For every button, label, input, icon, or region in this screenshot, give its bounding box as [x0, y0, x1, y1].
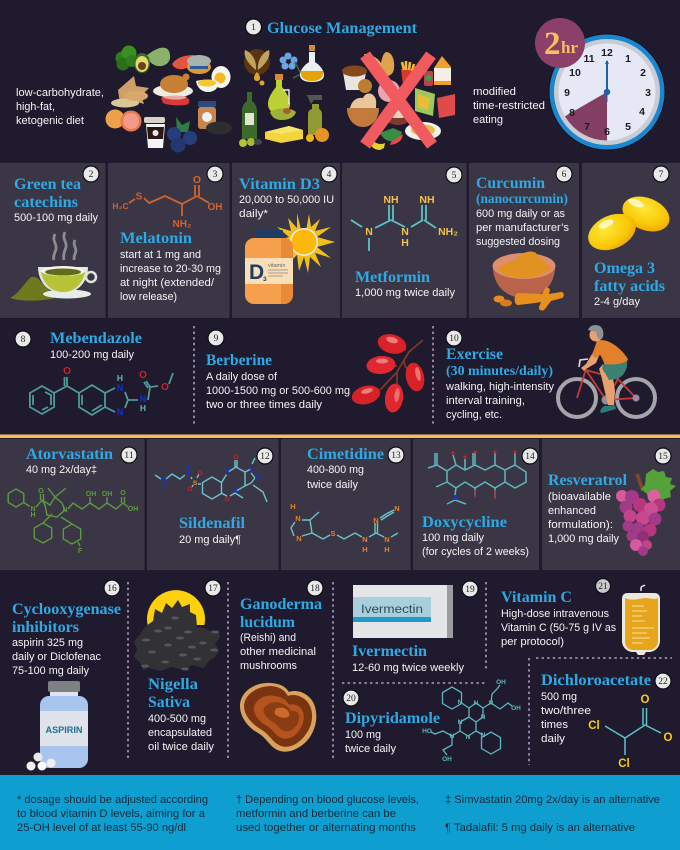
panel: curcumin [469, 163, 579, 318]
molecule: metformin: N [401, 226, 409, 238]
number 8: 8 [21, 335, 26, 345]
molecule: cimetidine: S [330, 529, 336, 538]
dose: formulation): [548, 519, 613, 531]
number 8 [15, 331, 31, 347]
molecule: cimetidine: N [295, 514, 301, 523]
panel: metformin [342, 163, 466, 318]
molecule: atorvastatin: O [38, 488, 44, 495]
panel: doxycycline [413, 439, 539, 570]
molecule: dichloroacetate: O [664, 732, 673, 744]
molecule: atorvastatin: OH [128, 506, 138, 513]
molecule: sildenafil: S [193, 480, 198, 487]
number 11: 11 [124, 451, 134, 461]
molecule: cimetidine: N [296, 534, 302, 543]
dose: 100 mg daily [422, 532, 484, 544]
number 4 [321, 166, 337, 182]
number 11 [121, 447, 137, 463]
number 7 [653, 166, 669, 182]
description: (Reishi) and [240, 632, 296, 644]
dose: 1000-1500 mg or 500-600 mg [206, 385, 350, 397]
number 12: 12 [260, 452, 270, 462]
molecule: mebendazole: N [117, 407, 123, 417]
number 18 [307, 580, 323, 596]
molecule: atorvastatin: N [30, 506, 36, 513]
number 16: 16 [107, 584, 117, 594]
dose: daily* [239, 208, 269, 220]
molecule: dichloroacetate [588, 694, 673, 770]
dose: per manufacturer’s [476, 222, 569, 234]
molecule: sildenafil: O [233, 454, 239, 461]
icon: clock with eating window: 2 [640, 67, 646, 79]
number 9 [208, 330, 224, 346]
text: time-restricted eating: modified [473, 86, 516, 98]
dose: suggested dosing [476, 236, 560, 248]
icon: clock with eating window: 7 [584, 121, 590, 133]
heading: Nigella [148, 676, 198, 693]
molecule: dipyridamole: N [474, 700, 479, 707]
panel: ivermectin [352, 581, 478, 674]
heading: catechins [14, 194, 78, 211]
icon group: keto foods [106, 46, 232, 152]
heading: Cyclooxygenase [12, 601, 121, 618]
molecule: atorvastatin: OH [102, 491, 112, 498]
molecule: dipyridamole: HO [422, 728, 432, 735]
dose: High-dose intravenous [501, 608, 609, 620]
heading: Ganoderma [240, 596, 322, 613]
panel: cyclooxygenase inhibitors [12, 580, 121, 770]
number 5: 5 [452, 171, 457, 181]
icon: cyclist [558, 325, 655, 417]
note: vitamin D: 25-OH level of at least 55-90 ng/dl [17, 822, 186, 834]
dose: twice daily [307, 479, 358, 491]
number 3: 3 [213, 170, 218, 180]
number 4: 4 [327, 170, 332, 180]
number 10 [446, 330, 462, 346]
dose: 2-4 g/day [594, 296, 640, 308]
number 16 [104, 580, 120, 596]
molecule: dipyridamole: N [458, 719, 463, 726]
number 15: 15 [658, 452, 668, 462]
molecule: sildenafil: N [185, 471, 190, 478]
number 13: 13 [391, 451, 401, 461]
note: metformin and berberine: metformin and berberine can be [236, 808, 396, 820]
molecule: metformin: H [401, 237, 409, 249]
dose: aspirin 325 mg [12, 637, 83, 649]
number 10: 10 [449, 334, 459, 344]
molecule: cimetidine: H [362, 545, 368, 554]
dose: start at 1 mg and [120, 249, 201, 261]
number 6 [556, 166, 572, 182]
icon: aspirin bottle [26, 681, 88, 770]
heading: Mebendazole [50, 330, 142, 347]
panel: dichloroacetate [541, 672, 673, 770]
number 22: 22 [658, 677, 668, 687]
dose: 500-100 mg daily [14, 212, 98, 224]
badge: 2hr [535, 18, 585, 68]
heading: Vitamin D3 [239, 176, 320, 193]
description: cycling, etc. [446, 409, 502, 421]
heading: Resveratrol [548, 472, 628, 489]
dose: daily [541, 733, 565, 745]
molecule: dichloroacetate: Cl [588, 720, 600, 732]
number 17: 17 [208, 584, 218, 594]
molecule: dipyridamole: N [466, 734, 471, 741]
molecule: sildenafil: N [233, 488, 238, 495]
molecule: melatonin: O [193, 174, 201, 186]
molecule: cimetidine: H [384, 545, 390, 554]
heading [12, 601, 121, 636]
icon: IV bag [622, 585, 660, 655]
dose: daily or Diclofenac [12, 651, 101, 663]
molecule: mebendazole: H [140, 403, 146, 413]
text: time-restricted eating: eating [473, 114, 503, 126]
dose: 600 mg daily or as [476, 208, 565, 220]
molecule: melatonin: H₃C [112, 201, 129, 211]
panel: berberine [206, 330, 427, 414]
dose: at night (extended/ [120, 277, 215, 289]
icon: vitamin D bottle: vitamin [268, 263, 285, 269]
heading: Berberine [206, 352, 272, 369]
heading: Atorvastatin [26, 446, 113, 463]
heading [240, 596, 322, 631]
dose [239, 194, 334, 220]
heading: Cimetidine [307, 446, 384, 463]
dose: increase to 20-30 mg [120, 263, 221, 275]
heading: fatty acids [594, 278, 665, 295]
heading: Vitamin C [501, 589, 572, 606]
icon: clock with eating window: 1 [625, 53, 631, 65]
icon group: healthy oils and fats [239, 45, 329, 147]
description: mushrooms [240, 660, 297, 672]
icon: vitamin D bottle: 3 [263, 276, 267, 283]
molecule: mebendazole: O [63, 366, 71, 377]
molecule: atorvastatin: H [30, 512, 36, 519]
heading [446, 346, 553, 378]
dose: 20,000 to 50,000 IU [239, 194, 334, 206]
molecule: atorvastatin: O [120, 490, 126, 497]
molecule: sildenafil: N [250, 466, 255, 473]
badge: 2hr: 2 [544, 26, 560, 62]
icon: vitamin D bottle [245, 230, 293, 304]
molecule: sildenafil: N [225, 468, 230, 475]
description: interval training, [446, 395, 525, 407]
molecule: sildenafil: H [161, 483, 166, 490]
panel: vitamin D3 [232, 163, 340, 318]
number 19: 19 [465, 585, 475, 595]
panel: glucose management [16, 18, 665, 152]
panel: exercise [445, 325, 655, 421]
note: simvastatin: ‡ Simvastatin 20mg 2x/day is an alternative [445, 794, 660, 806]
panel: vitamin C [501, 578, 660, 655]
note: metformin and berberine: † Depending on blood glucose levels, [236, 794, 419, 806]
note: vitamin D: to blood vitamin D levels, aiming for a [17, 808, 206, 820]
molecule: sildenafil [155, 454, 267, 503]
dose: 400-500 mg [148, 713, 206, 725]
number 21 [596, 578, 610, 594]
number 20 [343, 690, 359, 706]
molecule: dichloroacetate: Cl [618, 758, 630, 770]
panel: sildenafil [147, 439, 278, 570]
molecule: mebendazole: N [117, 383, 123, 393]
icon: ivermectin box: Ivermectin [361, 604, 423, 616]
dose [476, 208, 569, 248]
description [240, 632, 316, 672]
molecule: dipyridamole: N [481, 714, 486, 721]
number 21: 21 [598, 582, 608, 592]
molecule: cimetidine: H [290, 502, 296, 511]
icon: clock with eating window: 9 [564, 87, 570, 99]
dose [548, 491, 619, 545]
icon: nigella seeds [134, 590, 220, 671]
description: other medicinal [240, 646, 316, 658]
molecule: dichloroacetate: O [641, 694, 650, 706]
molecule: melatonin [112, 174, 222, 230]
heading: Sativa [148, 694, 190, 711]
section number 1: 1 [251, 23, 256, 33]
icon: red X [365, 55, 432, 145]
molecule: melatonin: OH [208, 202, 222, 213]
dose [148, 713, 214, 753]
molecule: metformin: NH [383, 194, 399, 206]
icon: reishi mushroom [240, 683, 316, 752]
molecule: cimetidine: N [362, 535, 368, 544]
number 20: 20 [346, 694, 356, 704]
dose: 500 mg [541, 691, 577, 703]
molecule: dipyridamole: N [450, 733, 455, 740]
molecule: dipyridamole: OH [511, 705, 521, 712]
molecule: atorvastatin: N [62, 507, 68, 514]
number 2: 2 [89, 170, 94, 180]
molecule: cimetidine: N [394, 504, 400, 513]
icon: clock with eating window: 5 [625, 121, 631, 133]
molecule: cimetidine [290, 502, 400, 554]
panel: nigella sativa [134, 580, 221, 753]
heading: Dipyridamole [345, 710, 440, 727]
icon: clock with eating window: 12 [601, 47, 613, 59]
molecule: sildenafil: O [187, 486, 193, 493]
heading: inhibitors [12, 619, 79, 636]
text: ketogenic diet: low-carbohydrate, [16, 87, 104, 99]
number 5 [446, 167, 462, 183]
heading [476, 175, 568, 206]
dose: 12-60 mg twice weekly [352, 662, 464, 674]
dose: times [541, 719, 568, 731]
heading: (nanocurcumin) [476, 191, 568, 206]
icon: clock with eating window: 6 [604, 126, 610, 138]
heading [14, 176, 81, 211]
dose: 100-200 mg daily [50, 349, 134, 361]
panel: green tea catechins [0, 163, 106, 318]
molecule: sildenafil: N [255, 474, 260, 481]
dose [307, 464, 364, 491]
description [445, 381, 554, 421]
heading: Omega 3 [594, 260, 655, 277]
panel: atorvastatin [0, 439, 144, 570]
note: vitamin D: * dosage should be adjusted according [17, 794, 208, 806]
number 14: 14 [525, 452, 535, 462]
dose: encapsulated [148, 727, 212, 739]
note: metformin and berberine: used together or alternating months [236, 822, 416, 834]
panel: omega 3 [582, 163, 680, 318]
icon: clock with eating window: 8 [569, 107, 575, 119]
dose [541, 691, 591, 745]
dose: 75-100 mg daily [12, 665, 89, 677]
icon: vitamin D bottle: D [249, 261, 264, 284]
icon: clock with eating window: 3 [645, 87, 651, 99]
text: ketogenic diet: high-fat, [16, 101, 55, 113]
dose: enhanced [548, 505, 596, 517]
molecule: mebendazole: O [139, 370, 147, 381]
molecule: atorvastatin: OH [86, 491, 96, 498]
panel: dipyridamole [343, 679, 521, 763]
molecule: cimetidine: N [384, 535, 390, 544]
text: time-restricted eating [473, 86, 545, 126]
heading: Green tea [14, 176, 81, 193]
heading: Exercise [446, 346, 503, 363]
note: vitamin D [17, 794, 208, 834]
icon: barberries [350, 331, 427, 414]
molecule: dipyridamole: N [489, 700, 494, 707]
badge: 2hr: hr [561, 38, 578, 57]
divider: gold rule [0, 434, 680, 438]
dose [206, 371, 350, 411]
dose: 100 mg [345, 729, 381, 741]
molecule: mebendazole: O [161, 382, 169, 393]
icon: clock with eating window: 10 [569, 67, 581, 79]
dose [120, 249, 221, 303]
molecule: atorvastatin [8, 488, 138, 555]
panel: cimetidine [281, 439, 410, 570]
heading: Melatonin [120, 230, 192, 247]
dose [345, 729, 396, 755]
text: time-restricted eating: time-restricted [473, 100, 545, 112]
molecule: dipyridamole: OH [442, 756, 452, 763]
heading [148, 676, 198, 711]
molecule: cimetidine: N [373, 516, 379, 525]
molecule: dipyridamole [422, 679, 521, 763]
heading: (30 minutes/daily) [446, 363, 553, 378]
panel: ganoderma lucidum [240, 580, 323, 752]
number 18: 18 [310, 584, 320, 594]
molecule: mebendazole: N [140, 394, 146, 404]
dose [422, 532, 529, 558]
icon: clock with eating window: 11 [583, 53, 595, 65]
molecule: sildenafil: H [185, 465, 190, 472]
icon: aspirin bottle: ASPIRIN [46, 725, 82, 735]
molecule: metformin: NH [419, 194, 435, 206]
heading: Curcumin [476, 175, 545, 192]
dose: 400-800 mg [307, 464, 364, 476]
molecule: metformin: NH₂ [438, 226, 458, 238]
heading: Dichloroacetate [541, 672, 651, 689]
number 17 [205, 580, 221, 596]
molecule: sildenafil: N [161, 477, 166, 484]
footer: notes [0, 775, 680, 850]
dose: twice daily [345, 743, 396, 755]
panel: melatonin [108, 163, 230, 318]
molecule: dipyridamole: N [481, 732, 486, 739]
dose: 1,000 mg twice daily [355, 287, 455, 299]
heading: Ivermectin [352, 643, 427, 660]
dose: A daily dose of [206, 371, 278, 383]
icon group: excluded carbohydrate foods [342, 52, 455, 150]
dose [501, 608, 616, 648]
dose: (for cycles of 2 weeks) [422, 546, 529, 558]
molecule: doxycycline [428, 450, 526, 504]
number 6: 6 [562, 170, 567, 180]
dose: 1,000 mg daily [548, 533, 619, 545]
title: Glucose Management [267, 20, 418, 37]
molecule: metformin [351, 194, 458, 251]
number 2 [83, 166, 99, 182]
icon: clock with eating window [535, 18, 665, 150]
icon: sun [272, 213, 335, 273]
molecule: sildenafil: O [197, 470, 203, 477]
molecule: metformin: N [365, 226, 373, 238]
description: walking, high-intensity [445, 381, 554, 393]
dose: per protocol) [501, 636, 564, 648]
number 3 [207, 166, 223, 182]
heading [594, 260, 665, 295]
heading: Metformin [355, 269, 430, 286]
molecule: melatonin: NH₂ [173, 219, 191, 230]
note: metformin and berberine [236, 794, 419, 834]
molecule: sildenafil: O [224, 496, 230, 503]
heading: Sildenafil [179, 515, 246, 532]
dose: 40 mg 2x/day‡ [26, 464, 97, 476]
dose: (bioavailable [548, 491, 611, 503]
icon: clock with eating window: 4 [639, 106, 645, 118]
dose: two or three times daily [206, 399, 322, 411]
molecule: mebendazole [30, 366, 173, 417]
panel: resveratrol [542, 439, 680, 570]
icon: green tea cup [10, 232, 96, 301]
number 9: 9 [214, 334, 219, 344]
molecule: dipyridamole: OH [496, 679, 506, 686]
molecule: mebendazole: H [117, 373, 123, 383]
section number 1 [246, 19, 262, 35]
icon: grapes [616, 469, 676, 556]
text: ketogenic diet: ketogenic diet [16, 115, 85, 127]
dose [12, 637, 101, 677]
icon: turmeric bowl and root [492, 252, 564, 310]
dose: Vitamin C (50-75 g IV as [501, 622, 616, 634]
panel: mebendazole [15, 330, 173, 417]
text: ketogenic diet [16, 87, 104, 127]
molecule: melatonin: S [136, 192, 143, 202]
dose: 20 mg daily¶ [179, 534, 241, 546]
icon: omega 3 capsules [582, 190, 675, 257]
note: tadalafil: ¶ Tadalafil: 5 mg daily is an alternative [445, 822, 635, 834]
molecule: dipyridamole: N [458, 699, 463, 706]
dose: oil twice daily [148, 741, 214, 753]
dose: low release) [120, 291, 177, 303]
number 7: 7 [659, 170, 664, 180]
dose: two/three [541, 705, 591, 717]
heading: Doxycycline [422, 514, 507, 531]
heading: lucidum [240, 614, 296, 631]
molecule: atorvastatin: F [78, 548, 83, 555]
